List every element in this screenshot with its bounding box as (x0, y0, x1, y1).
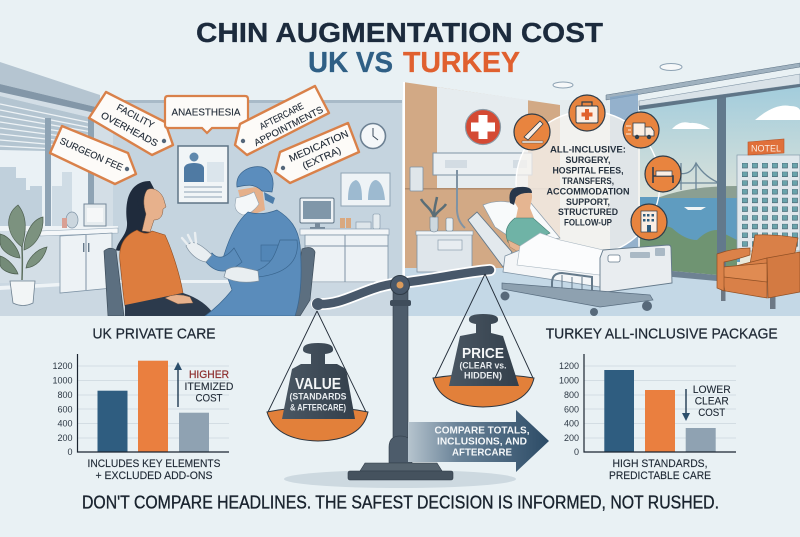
plant (0, 205, 47, 306)
cost tag: aftercare appointments: AFTERCARE (258, 101, 306, 133)
bar chart: Turkey: 800 (564, 390, 579, 400)
caption: UK chart: + EXCLUDED ADD-ONS (96, 470, 212, 482)
caption: UK chart: INCLUDES KEY ELEMENTS (88, 458, 220, 470)
title: TURKEY (403, 47, 520, 79)
right pan with price weight: PRICE (462, 345, 504, 362)
cost tag: anaesthesia (165, 96, 248, 133)
left pan with value weight: (STANDARDS (290, 392, 346, 402)
icon: bed (645, 156, 681, 192)
hospital bed with patient (468, 187, 672, 316)
all-inclusive text: ALL-INCLUSIVE: (550, 144, 626, 154)
icon: transfer van (623, 112, 659, 148)
bar chart: Turkey: 600 (564, 404, 579, 414)
scale post and base (348, 290, 453, 480)
arrow: compare totals (408, 410, 549, 472)
arrow: lower cost (682, 389, 690, 421)
all-inclusive text (546, 144, 630, 228)
translucent all-inclusive circle (516, 111, 660, 255)
all-inclusive text: SUPPORT, (566, 197, 610, 207)
doctor (182, 167, 315, 316)
bar chart: Turkey: 1000 (559, 376, 579, 386)
bar chart: Turkey: 400 (564, 418, 579, 428)
bar chart: Turkey (559, 354, 736, 457)
title (196, 17, 603, 79)
all-inclusive text: HOSPITAL FEES, (552, 166, 624, 176)
bar chart: Turkey: 0 (574, 447, 579, 457)
lower panel background (0, 316, 800, 537)
heading: UK private care: UK PRIVATE CARE (92, 326, 216, 342)
callout: higher itemized cost (184, 369, 234, 404)
all-inclusive text: STRUCTURED (558, 207, 618, 217)
cost tag: medication: (EXTRA) (301, 145, 343, 172)
callout: lower clear cost: LOWER (693, 384, 731, 396)
hotel building: NOTEL (751, 144, 781, 154)
right pan with price weight: (CLEAR vs. (460, 360, 506, 370)
arrow: compare totals: AFTERCARE (452, 448, 512, 458)
cost tag: medication: MEDICATION (288, 129, 350, 165)
all-inclusive text: SURGERY, (566, 155, 610, 165)
callout: higher itemized cost: HIGHER (189, 369, 229, 381)
balance scale (267, 270, 534, 488)
caption: Turkey chart: PREDICTABLE CARE (609, 470, 711, 482)
icon: scalpel (514, 114, 550, 150)
caption: UK chart (88, 458, 220, 482)
caption: Turkey chart: HIGH STANDARDS, (612, 458, 708, 470)
armchair (717, 235, 800, 309)
left pan with value weight (267, 311, 368, 441)
cost tag: anaesthesia: ANAESTHESIA (172, 108, 241, 118)
scale beam (312, 270, 490, 310)
bar chart: UK: 800 (57, 390, 72, 400)
hotel building (737, 139, 800, 251)
callout: lower clear cost: COST (698, 407, 725, 419)
panel: Turkey hospital scene (403, 63, 800, 316)
bar chart: UK: 1200 (52, 361, 72, 371)
arrow: compare totals: INCLUSIONS, AND (437, 436, 527, 448)
bar chart: UK: 400 (57, 418, 72, 428)
callout: higher itemized cost: ITEMIZED (184, 381, 234, 393)
left pan with value weight: VALUE (295, 376, 341, 393)
icon: medical kit (569, 95, 605, 131)
icon: hotel building (631, 204, 667, 240)
panel: UK clinic scene (0, 62, 402, 316)
all-inclusive text: ACCOMMODATION (546, 186, 630, 196)
counter and cabinets left (0, 204, 118, 293)
title: CHIN AUGMENTATION COST (196, 17, 603, 48)
heading: Turkey all-inclusive package: TURKEY ALL-INCLUSIVE PACKAGE (546, 326, 778, 342)
bar chart: UK: 1000 (52, 376, 72, 386)
arrow: compare totals: COMPARE TOTALS, (434, 426, 530, 436)
caption: Turkey chart (609, 458, 711, 482)
nightstand with vase (416, 197, 473, 272)
cost tag: aftercare appointments (235, 86, 329, 155)
cost tag: surgeon fee: SURGEON FEE (58, 136, 124, 174)
cost tag: aftercare appointments: APPOINTMENTS (253, 105, 325, 149)
all-inclusive text: TRANSFERS, (562, 176, 614, 186)
callout: lower clear cost: CLEAR (695, 396, 729, 408)
woman patient (104, 181, 215, 316)
bar chart: UK: 0 (67, 447, 72, 457)
window view (606, 63, 800, 281)
icon: red cross (466, 110, 500, 144)
bar chart: UK: 600 (57, 404, 72, 414)
cost tag: medication (275, 123, 359, 183)
right pan with price weight: HIDDEN) (464, 370, 502, 380)
wall anatomy picture (341, 173, 390, 206)
bar chart: Turkey: 200 (564, 433, 579, 443)
cost tag: facility overheads: FACILITY (114, 102, 156, 132)
cost tag: surgeon fee (50, 126, 136, 184)
window with blinds (0, 96, 94, 228)
counter with monitor (300, 198, 389, 282)
wall panel (410, 153, 532, 228)
right pan with price weight (433, 274, 534, 407)
bar chart: Turkey: 1200 (559, 361, 579, 371)
poster (178, 146, 228, 203)
cost tag: facility overheads: OVERHEADS (99, 110, 160, 149)
callout: higher itemized cost: COST (196, 392, 223, 404)
all-inclusive text: FOLLOW-UP (564, 218, 612, 228)
title: UK VS (308, 47, 393, 79)
cost tag: facility overheads (89, 92, 173, 155)
bar chart: UK (52, 354, 234, 457)
left pan with value weight: & AFTERCARE) (290, 402, 346, 412)
arrow: higher cost (174, 362, 182, 407)
callout: lower clear cost (693, 384, 731, 419)
clock (360, 124, 386, 148)
bar chart: UK: 200 (57, 433, 72, 443)
